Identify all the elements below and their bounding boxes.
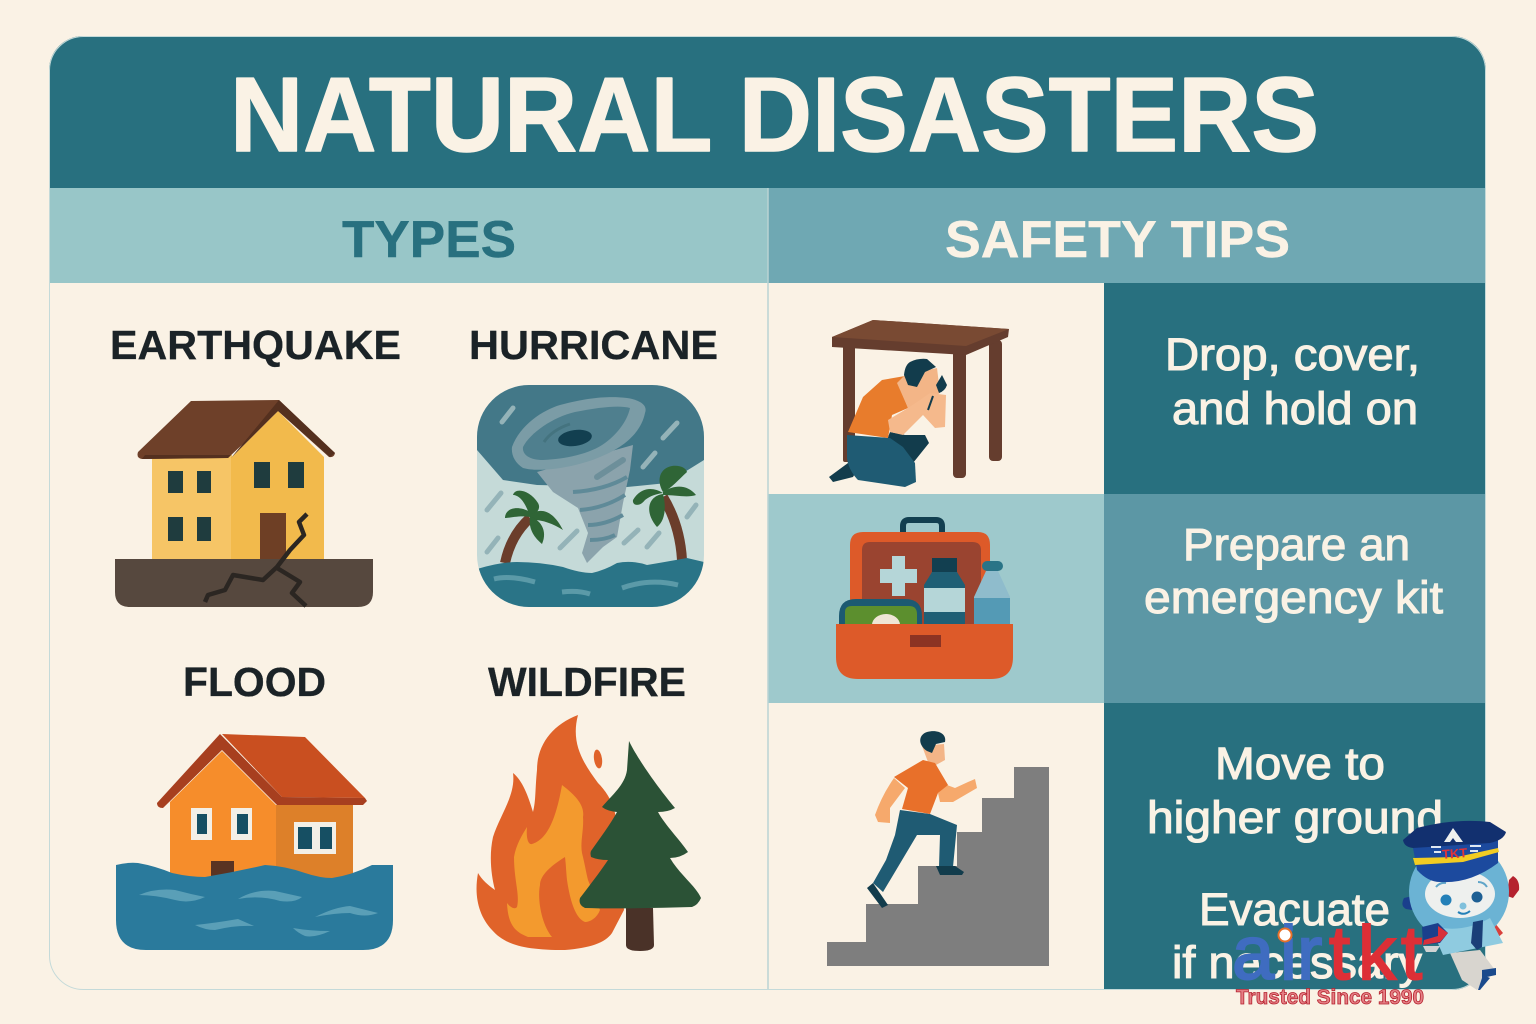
- icon: wildfire and tree: [477, 715, 701, 951]
- tip text: drop, cover, and hold on: Drop, cover,: [1165, 329, 1420, 380]
- panel: types header band: [49, 188, 768, 283]
- tip text: drop, cover, and hold on: and hold on: [1172, 383, 1418, 434]
- label: wildfire: WILDFIRE: [488, 659, 686, 705]
- tip text: evacuate if necessary: if necessary: [1172, 937, 1423, 988]
- panel: tip row 1 text background: [1104, 283, 1486, 494]
- icon: logo dot: [1278, 928, 1292, 942]
- heading: safety tips: SAFETY TIPS: [945, 211, 1290, 269]
- icon: earthquake house: [115, 400, 373, 607]
- panel: safety tips header band: [768, 188, 1486, 283]
- tip text: evacuate if necessary: Evacuate: [1199, 884, 1390, 935]
- heading: types: TYPES: [342, 211, 516, 269]
- icon: person climbing stairs: [827, 731, 1049, 966]
- icon: person under table: [829, 320, 1009, 487]
- tip text: move to higher ground: [1147, 738, 1443, 843]
- wordmark: airtkt: [1232, 911, 1422, 996]
- mascot: pilot character: [1402, 821, 1519, 990]
- tagline: Trusted Since 1990: [1236, 986, 1424, 1009]
- panel: title banner: [49, 36, 1486, 188]
- tip text: drop, cover, and hold on: [1165, 329, 1420, 434]
- panel: tip row 3 text background: [1104, 703, 1486, 990]
- icon: flooded house: [116, 734, 393, 950]
- panel: tip row 2 text background: [1104, 494, 1486, 703]
- tip text: prepare an emergency kit: emergency kit: [1144, 572, 1444, 623]
- tip text: move to higher ground: higher ground: [1147, 792, 1443, 843]
- tip text: prepare an emergency kit: Prepare an: [1183, 519, 1410, 570]
- label: flood: FLOOD: [183, 659, 326, 705]
- watermark: airtkt logo: [1232, 911, 1424, 1009]
- tip text: evacuate if necessary: [1172, 884, 1423, 988]
- icon: hurricane: [477, 385, 704, 607]
- icon: emergency kit: [836, 520, 1013, 679]
- tip text: move to higher ground: Move to: [1215, 738, 1385, 789]
- label: hurricane: HURRICANE: [469, 322, 718, 368]
- label: earthquake: EARTHQUAKE: [110, 322, 401, 368]
- tip text: prepare an emergency kit: [1144, 519, 1444, 623]
- panel: tip row 2 image background: [768, 494, 1104, 703]
- title: NATURAL DISASTERS: [230, 56, 1319, 174]
- mascot: pilot character: TKT: [1442, 845, 1468, 862]
